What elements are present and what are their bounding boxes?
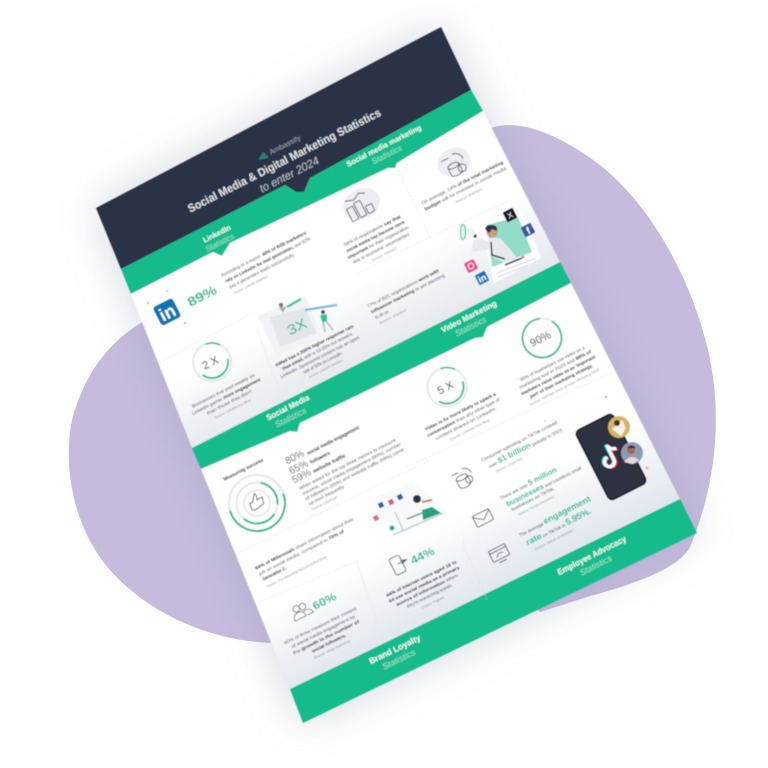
text: social media importance bbox=[341, 213, 416, 271]
text: businesses using video: marketing tool in 2023 and 88% of bbox=[518, 349, 593, 390]
text: top three metrics: success, social media engagement (80%), number bbox=[301, 441, 402, 496]
text: businesses on TikTok: Source: Sprout Resources bbox=[518, 495, 555, 516]
text: Millennials: Generation Z. bbox=[261, 566, 287, 582]
heading: Social media marketing: Social media marketing bbox=[345, 123, 423, 169]
green footer band bbox=[290, 499, 697, 723]
green square bbox=[487, 217, 532, 267]
text: top three metrics: Source: Influencer bbox=[311, 495, 339, 511]
text: weekly posting: LinkedIn garner more engagement bbox=[191, 377, 262, 416]
3X label: 3X bbox=[284, 315, 310, 338]
brand logo bbox=[258, 135, 303, 160]
text: LinkedIn lead generation: rely on LinkedIn for lead generation, and 62% bbox=[224, 236, 311, 284]
text: consumer spending: Consumer spending on TikTok crossed bbox=[480, 420, 559, 463]
text: social media importance: Source: Hubspot bbox=[371, 246, 398, 262]
text: video conversion: Source: LinkedIn Key Blog bbox=[449, 418, 490, 442]
text: weekly posting bbox=[188, 371, 268, 428]
text: influencer marketing: to do so. bbox=[374, 308, 391, 320]
icon: Instagram bbox=[464, 259, 478, 273]
text: LinkedIn lead generation: According to a report, 40% of B2B marketers bbox=[220, 230, 307, 278]
text: social media importance: 58% of respondents say that bbox=[343, 214, 402, 247]
text: businesses using video: marketers value video as an 'important bbox=[520, 354, 597, 396]
heading: Employee Advocacy: Employee Advocacy bbox=[556, 534, 628, 577]
chart: concentric rings with thumb bbox=[221, 467, 293, 539]
dark header bbox=[96, 27, 471, 269]
picture frame bbox=[480, 212, 541, 283]
heading: Brand Loyalty: Brand Loyalty bbox=[367, 632, 422, 666]
text: follower growth: social followers. bbox=[311, 633, 347, 654]
text: marketing budget: Source: HubSpot bbox=[455, 187, 483, 204]
text: internet users bbox=[385, 559, 469, 621]
green bar and figure bbox=[279, 299, 301, 313]
green band: Social Media / Video Marketing bbox=[192, 262, 571, 469]
text: LinkedIn lead generation bbox=[220, 230, 318, 297]
pale frame bbox=[368, 482, 448, 538]
stats: 80% 65% 59%: website traffic bbox=[311, 453, 347, 475]
text: video conversion: content shared on LinkedIn. bbox=[435, 406, 498, 441]
text: internet users: source of information when bbox=[395, 573, 459, 607]
icon: LinkedIn: in bbox=[156, 300, 179, 325]
green band: LinkedIn / Social media marketing bbox=[121, 90, 483, 294]
chart: 5X ring: 5 X bbox=[436, 379, 456, 397]
text: marketing budget bbox=[421, 160, 511, 218]
text: Millennials bbox=[254, 516, 364, 590]
heading: Social Media: Social Media bbox=[265, 393, 311, 422]
hand on desk bbox=[522, 256, 524, 258]
icon: X: X bbox=[506, 210, 515, 221]
chart: 90% ring: 90% bbox=[528, 329, 553, 350]
text: video conversion: conversation than any other type of bbox=[426, 396, 501, 438]
icon: envelope bbox=[472, 509, 494, 527]
raised arm bbox=[472, 238, 490, 252]
text: consumer spending: Source: Circa Post bbox=[495, 456, 524, 474]
icon: LinkedIn small: in bbox=[476, 272, 488, 285]
purple blob background bbox=[69, 125, 716, 643]
icon: LinkedIn small bbox=[475, 271, 489, 285]
section panel: LinkedIn and marketing statistics bbox=[131, 111, 560, 448]
heading: Brand Loyalty: Statistics bbox=[380, 647, 418, 672]
icon: Facebook: f bbox=[525, 225, 533, 237]
text: top three metrics bbox=[298, 436, 411, 512]
chart: 2X ring: 2 X bbox=[201, 354, 221, 372]
text: internet users: 64 use social media as a primary bbox=[388, 565, 461, 604]
tie bbox=[491, 242, 505, 259]
text: LinkedIn lead generation: say it generates leads successfully bbox=[228, 252, 295, 289]
text: weekly posting: Source: LinkedIn Key Blog bbox=[214, 398, 251, 420]
section panel: social, video and TikTok statistics bbox=[201, 283, 680, 689]
text: follower growth bbox=[283, 606, 370, 669]
text: engagement rate: Source: Oberlo of Marketer bbox=[534, 528, 575, 552]
heading: Social media marketing: Statistics bbox=[370, 143, 404, 166]
text: businesses using video bbox=[514, 342, 603, 408]
label: measuring success: Measuring success bbox=[223, 457, 265, 483]
text: social media importance: social media has become more bbox=[345, 219, 406, 253]
text: engagement rate bbox=[516, 493, 601, 555]
icon: monitor bbox=[488, 544, 511, 565]
text: influencer marketing: Source: Martech bbox=[378, 308, 407, 325]
text: top three metrics: When asked for the top three metrics to measure bbox=[298, 437, 397, 491]
text: InMail bbox=[274, 323, 366, 390]
text: internet users: 44% of internet users aged 16 to bbox=[385, 559, 458, 598]
chart: 90% ring bbox=[515, 311, 569, 365]
text: Millennials: 84% of Millennials share information about their bbox=[254, 516, 355, 571]
stats: 80% 65% 59%: followers bbox=[309, 450, 332, 466]
arm bbox=[407, 513, 422, 519]
shirt bbox=[488, 238, 517, 263]
illustration: man with megaphone bbox=[460, 212, 541, 283]
icon: LinkedIn bbox=[152, 298, 182, 327]
chart: 2X ring bbox=[188, 338, 236, 386]
illustration: 3X screen with figures bbox=[258, 296, 337, 356]
text: marketing budget: budget will be invested in social media bbox=[424, 166, 507, 212]
text: internet users: Source: Yaguara bbox=[421, 595, 445, 610]
head bbox=[486, 226, 498, 238]
heading: Video Marketing: Statistics bbox=[453, 314, 489, 338]
icon: coins bbox=[451, 465, 476, 491]
stats: 80% 65% 59%: 59% bbox=[290, 467, 313, 486]
text: businesses using video: 95% of businesses use video as a bbox=[519, 345, 586, 382]
megaphone bbox=[460, 224, 475, 240]
text: engagement rate: rate on TikTok is 5.95%. bbox=[524, 506, 593, 547]
thumbs up bbox=[247, 491, 266, 511]
text: consumer spending: over $1 billion globally in 2023. bbox=[486, 424, 565, 470]
inner screen bbox=[270, 308, 317, 347]
icon: X bbox=[503, 208, 517, 222]
subtitle: to enter 2024 bbox=[258, 155, 321, 195]
stat: 89%: 89% bbox=[185, 282, 220, 310]
text: weekly posting: than those that don't bbox=[206, 388, 253, 416]
stats: 80% 65% 59%: social media engagement bbox=[306, 425, 361, 457]
stat: 44%: 44% bbox=[409, 545, 437, 567]
text: follower growth: the growth in the number of bbox=[292, 619, 360, 656]
heading: Social Media: Statistics bbox=[273, 405, 309, 429]
heading: LinkedIn bbox=[201, 223, 236, 254]
monitor stand bbox=[393, 512, 443, 535]
text: InMail: Source: LinkedIn Statistics bbox=[308, 358, 344, 379]
text: businesses on TikTok: businesses and countless small bbox=[505, 463, 583, 508]
text: Millennials: job on social media, compared to 70% of bbox=[257, 529, 345, 577]
text: video conversion bbox=[423, 391, 507, 450]
text: internet users: they're researching brands. bbox=[406, 582, 453, 609]
stat: 60%: 60% bbox=[311, 591, 339, 613]
text: social media importance: important for their organization bbox=[347, 224, 410, 260]
phone body bbox=[575, 413, 647, 501]
text: top three metrics: of followers (65%) and website traffic (59%) came bbox=[305, 447, 405, 501]
text: follower growth: Source: Mega Marketing bbox=[313, 639, 351, 660]
avatar: gold bbox=[608, 416, 630, 438]
text: InMail: rate of 50% on LinkedIn. bbox=[302, 350, 344, 375]
decorative dots: LinkedIn bbox=[147, 290, 186, 324]
text: InMail: LinkedIn. Sponsored content has an open bbox=[280, 334, 361, 379]
text: follower growth: of social media engagement by bbox=[291, 614, 356, 649]
icon: phone bbox=[389, 552, 411, 576]
head bbox=[413, 495, 421, 503]
scarf bbox=[422, 500, 432, 502]
heading: LinkedIn: Statistics bbox=[204, 232, 236, 254]
text: InMail: than email, with a 10-25% but remains bbox=[281, 331, 354, 371]
text: influencer marketing bbox=[366, 267, 452, 327]
text: social media importance: due to economic uncertainties bbox=[352, 231, 411, 265]
heading: Video Marketing: Video Marketing bbox=[440, 299, 498, 335]
document bbox=[96, 27, 697, 723]
TikTok logo bbox=[597, 441, 624, 470]
heading: Employee Advocacy: Statistics bbox=[578, 553, 614, 578]
logo mark bbox=[258, 152, 268, 160]
text: weekly posting: Businesses that post weekly on bbox=[191, 372, 256, 409]
lower arm bbox=[505, 258, 522, 265]
document shadow bbox=[96, 27, 697, 723]
text: top three metrics: up most frequently. bbox=[308, 484, 346, 506]
chart: 5X ring bbox=[422, 362, 472, 412]
text: consumer spending bbox=[480, 419, 567, 477]
blue bar and figure bbox=[305, 305, 337, 332]
social icons bbox=[373, 494, 403, 530]
text: follower growth: 60% of firms measure their content bbox=[283, 606, 358, 645]
icon: Facebook bbox=[521, 223, 536, 239]
text: businesses using video: Source: HubSpot State of Video Marketing 2023 bbox=[529, 368, 600, 407]
illustration: person at computer with social icons bbox=[368, 482, 448, 538]
text: influencer marketing: influencer marketing or are planning bbox=[370, 273, 446, 314]
stats: 80% 65% 59%: 65% bbox=[287, 458, 310, 477]
text: engagement rate: The average engagement bbox=[516, 493, 592, 539]
hair bbox=[485, 225, 497, 233]
icon: bar chart bbox=[338, 182, 385, 226]
text: businesses on TikTok: There are over 5 million bbox=[498, 465, 558, 502]
icon: people bbox=[289, 600, 313, 621]
decorative dots: TikTok bbox=[544, 396, 648, 469]
text: businesses on TikTok: businesses on TikTok. bbox=[510, 486, 555, 512]
outer frame bbox=[258, 296, 322, 356]
caption lines bbox=[497, 258, 536, 277]
hand holding megaphone bbox=[473, 234, 477, 238]
text: LinkedIn lead generation: Source: LinkedIn Statistics bbox=[233, 274, 269, 295]
stats: 80% 65% 59% bbox=[283, 425, 361, 486]
text: marketing budget: On average, 14% of the total marketing bbox=[421, 160, 504, 206]
text: businesses on TikTok bbox=[498, 455, 588, 520]
avatar: blue bbox=[621, 442, 643, 464]
logo text: Ambassify bbox=[269, 135, 303, 156]
body bbox=[422, 507, 441, 520]
icon: coins and hand bbox=[432, 142, 475, 182]
heading: LinkedIn: LinkedIn bbox=[201, 223, 233, 245]
text: businesses using video: part' of their marketing strategy. bbox=[529, 363, 593, 399]
text: InMail: InMail has a 300% higher response rate bbox=[274, 323, 355, 368]
stats: 80% 65% 59%: 80% bbox=[283, 448, 306, 467]
title: Social Media & Digital Marketing Statistics bbox=[186, 107, 383, 215]
text: video conversion: Video is 5x more likely to spark a bbox=[424, 391, 497, 432]
phone with TikTok logo bbox=[575, 413, 647, 501]
text: Millennials: Source: Fox Marketing Resources/Benzinga bbox=[266, 555, 328, 589]
text: influencer marketing: 77% of B2C organizations work with bbox=[366, 268, 440, 309]
